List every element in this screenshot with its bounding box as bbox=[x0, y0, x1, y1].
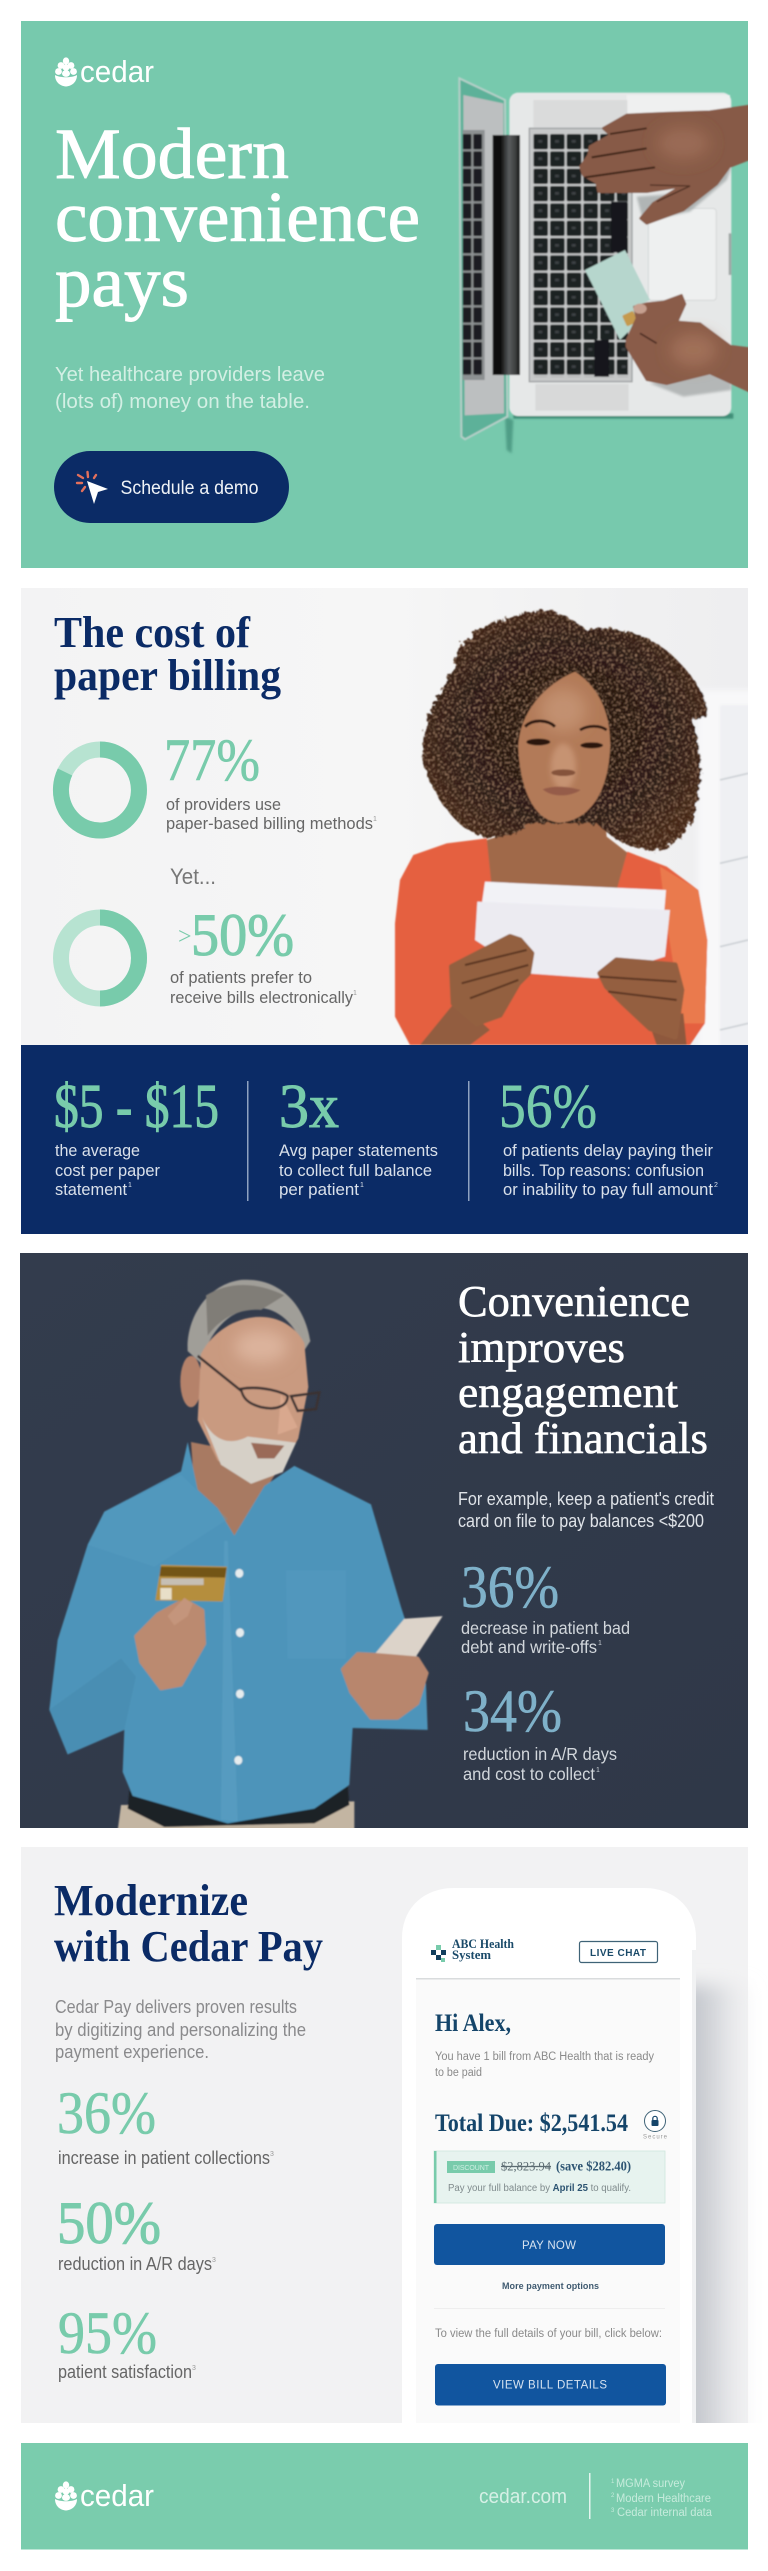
sources: 1 bbox=[611, 2479, 615, 2485]
stat: 77% of providers: 77% bbox=[164, 727, 260, 793]
paragraph: payment experience. bbox=[55, 2042, 209, 2062]
stat: 95% satisfaction: 3 bbox=[192, 2365, 196, 2372]
stat: cost per statement bbox=[54, 1073, 219, 1199]
laptop shadow bbox=[505, 417, 513, 453]
stat: 56% delay: 56% bbox=[499, 1073, 597, 1141]
window background bbox=[698, 690, 755, 1057]
section heading: The cost of bbox=[54, 608, 251, 657]
stat: 34% reduction: 34% bbox=[463, 1678, 562, 1744]
right hand bbox=[343, 1654, 427, 1718]
stat: over 50% of patients: 50% bbox=[191, 902, 294, 968]
icon: pine cone bbox=[55, 2481, 77, 2510]
website: cedar.com bbox=[479, 2486, 567, 2508]
top: coral bbox=[395, 838, 707, 1045]
stat: 77% of providers: of providers use bbox=[166, 795, 281, 814]
hinge bbox=[493, 135, 520, 375]
logo: cedar bbox=[55, 54, 154, 89]
pants bbox=[118, 1801, 354, 1831]
stat: 36% decrease bbox=[461, 1554, 630, 1657]
photo: laptop and hands with card bbox=[459, 78, 750, 453]
stat: 56% delay: 2 bbox=[714, 1182, 718, 1189]
stat: 56% delay: or inability to pay full amount bbox=[503, 1180, 713, 1199]
section heading: engagement bbox=[458, 1368, 678, 1417]
hand: top bbox=[581, 106, 750, 223]
stat: 50% A/R days bbox=[57, 2190, 216, 2274]
belt bbox=[128, 1783, 349, 1827]
stat: 50% A/R days: reduction in A/R days bbox=[58, 2254, 212, 2274]
photo: man with card and phone bbox=[49, 1280, 443, 1831]
stat: 3x statements: 1 bbox=[360, 1182, 364, 1189]
stat: 3x statements: per patient bbox=[279, 1180, 359, 1199]
button: live chat: LIVE CHAT bbox=[590, 1948, 646, 1959]
stat: 36% collections: 36% bbox=[57, 2080, 156, 2146]
discount box: Pay your full balance by April 25 to qualify. bbox=[448, 2183, 631, 2194]
phone header: ABC Health bbox=[452, 1936, 515, 1951]
section heading: and financials bbox=[458, 1414, 708, 1463]
stat: 3x statements: to collect full balance bbox=[279, 1161, 432, 1180]
phone header: System bbox=[452, 1947, 491, 1962]
hand: right bbox=[600, 960, 682, 1037]
stat: 36% decrease: 36% bbox=[461, 1554, 559, 1620]
hand: left bbox=[452, 937, 532, 1023]
stat: 34% reduction bbox=[463, 1678, 617, 1784]
divider bbox=[247, 1081, 248, 1201]
sources: MGMA survey bbox=[616, 2478, 685, 2490]
sources bbox=[611, 2478, 713, 2519]
stat: 56% delay: of patients delay paying their bbox=[503, 1141, 713, 1160]
left hand bbox=[136, 1600, 204, 1688]
gold card bbox=[155, 1565, 227, 1602]
laptop lid bbox=[459, 78, 507, 439]
shirt bbox=[49, 1442, 428, 1823]
stat: over 50% of patients bbox=[170, 902, 357, 1007]
sources: Modern Healthcare bbox=[616, 2493, 711, 2505]
logo: cedar: cedar bbox=[80, 2478, 154, 2513]
text: credit card example: card on file to pay balances <$200 bbox=[458, 1511, 704, 1531]
button: schedule a demo: Schedule a demo bbox=[120, 478, 258, 499]
panel: modernize with cedar pay bbox=[21, 1847, 756, 2465]
stat: 95% satisfaction: patient satisfaction bbox=[58, 2362, 192, 2382]
stat: 77% of providers: 1 bbox=[373, 816, 377, 823]
donut chart: 50% bbox=[61, 918, 139, 998]
bill message bbox=[435, 2051, 654, 2079]
divider bbox=[468, 1081, 470, 1201]
panel: hero bbox=[21, 21, 750, 568]
paragraph bbox=[55, 1997, 306, 2062]
papers bbox=[475, 882, 670, 978]
button: pay now: PAY NOW bbox=[522, 2240, 576, 2252]
phone mockup bbox=[402, 1888, 696, 2423]
stat: 3x statements: Avg paper statements bbox=[279, 1141, 438, 1160]
wordmark: cedar bbox=[80, 54, 154, 89]
neck and chest bbox=[487, 803, 628, 890]
greeting: Hi Alex, bbox=[435, 2010, 511, 2037]
phone bbox=[373, 1616, 443, 1657]
hero title bbox=[55, 114, 420, 322]
section heading: Modernize bbox=[54, 1876, 248, 1925]
icon: pine cone bbox=[55, 57, 77, 86]
icon: secure lock: Secure bbox=[643, 2134, 668, 2140]
stat: cost per statement: the average bbox=[55, 1141, 140, 1160]
stat: 36% decrease: 1 bbox=[598, 1640, 602, 1647]
phone header bbox=[416, 1936, 680, 1980]
hero subtitle bbox=[55, 364, 325, 413]
stat: 36% decrease: decrease in patient bad bbox=[461, 1618, 630, 1638]
stat: 95% satisfaction bbox=[58, 2300, 196, 2382]
stat: 34% reduction: and cost to collect bbox=[463, 1764, 595, 1784]
section heading: with Cedar Pay bbox=[54, 1922, 323, 1971]
hair bbox=[423, 610, 707, 850]
hero title: Modern bbox=[55, 114, 289, 194]
stat: cost per statement: $5 - $15 bbox=[54, 1073, 219, 1141]
stat: cost per statement: statement bbox=[55, 1180, 127, 1199]
stat: 77% of providers: paper-based billing methods bbox=[166, 814, 373, 833]
glasses bbox=[198, 1356, 319, 1411]
stat: 50% A/R days: 50% bbox=[57, 2190, 161, 2256]
stat: over 50% of patients: receive bills electronically bbox=[170, 988, 353, 1007]
icon: cursor click bbox=[77, 472, 108, 504]
sources: Cedar internal data bbox=[617, 2507, 713, 2519]
hero subtitle: (lots of) money on the table. bbox=[55, 391, 310, 413]
hand: bottom bbox=[627, 295, 750, 397]
button: view bill details bbox=[435, 2364, 666, 2406]
bill message: to be paid bbox=[435, 2067, 482, 2079]
section heading bbox=[54, 1876, 323, 1971]
stat: 36% collections: increase in patient collections bbox=[58, 2148, 270, 2168]
hero subtitle: Yet healthcare providers leave bbox=[55, 364, 325, 386]
panel: the cost of paper billing bbox=[21, 588, 755, 1057]
stat: over 50% of patients: of patients prefer to bbox=[170, 968, 312, 987]
stat: 34% reduction: 1 bbox=[596, 1767, 600, 1774]
stat: 50% A/R days: 3 bbox=[212, 2257, 216, 2264]
hair bbox=[188, 1280, 310, 1363]
section heading bbox=[54, 608, 281, 700]
stat: 56% delay bbox=[499, 1073, 718, 1199]
photo: woman reading bills bbox=[395, 610, 755, 1057]
text: yet: Yet... bbox=[170, 864, 216, 889]
face bbox=[518, 672, 610, 823]
credit card bbox=[585, 250, 650, 340]
discount box: DISCOUNT bbox=[453, 2165, 490, 2172]
text: credit card example: For example, keep a patient's credit bbox=[458, 1489, 714, 1509]
stat: over 50% of patients: > bbox=[178, 924, 192, 950]
total due: Total Due: $2,541.54 bbox=[435, 2110, 628, 2137]
stat: 77% of providers bbox=[164, 727, 377, 833]
stat: over 50% of patients: 1 bbox=[353, 990, 357, 997]
stat: 34% reduction: reduction in A/R days bbox=[463, 1744, 617, 1764]
text: credit card example bbox=[458, 1489, 714, 1531]
button: schedule a demo bbox=[54, 451, 289, 523]
ear bbox=[180, 1356, 202, 1407]
panel: navy statistics band bbox=[21, 1045, 748, 1234]
paragraph: Cedar Pay delivers proven results bbox=[55, 1997, 297, 2017]
stat: 36% collections: 3 bbox=[270, 2151, 274, 2158]
phone shadow bbox=[696, 1978, 736, 2423]
stat: 36% collections bbox=[57, 2080, 274, 2168]
button: pay now bbox=[434, 2224, 665, 2265]
paragraph: by digitizing and personalizing the bbox=[55, 2020, 306, 2040]
stat: 36% decrease: debt and write-offs bbox=[461, 1637, 597, 1657]
hero title: pays bbox=[55, 242, 189, 322]
stat: cost per statement: cost per paper bbox=[55, 1161, 160, 1180]
stat: 3x statements: 3x bbox=[279, 1073, 339, 1141]
neck bbox=[191, 1442, 284, 1537]
stat: 3x statements bbox=[279, 1073, 438, 1199]
bill details prompt: To view the full details of your bill, click below: bbox=[435, 2328, 662, 2340]
discount box: $2,823.94 bbox=[501, 2158, 551, 2174]
section heading: paper billing bbox=[54, 651, 281, 700]
stat: 95% satisfaction: 95% bbox=[58, 2300, 157, 2366]
button: live chat bbox=[580, 1942, 658, 1962]
panel: convenience bbox=[20, 1253, 748, 1831]
link: more payment options: More payment options bbox=[502, 2281, 599, 2291]
bill message: You have 1 bill from ABC Health that is ready bbox=[435, 2051, 654, 2063]
icon: ABC logo bbox=[431, 1945, 446, 1962]
icon: secure lock bbox=[643, 2110, 668, 2140]
section heading: improves bbox=[458, 1323, 625, 1372]
sources: 2 bbox=[611, 2493, 615, 2499]
buttons bbox=[234, 1569, 244, 1765]
section heading bbox=[458, 1277, 708, 1463]
panel: footer bbox=[21, 2443, 748, 2550]
laptop base bbox=[509, 93, 731, 416]
stat: cost per statement: 1 bbox=[128, 1182, 132, 1189]
discount box: (save $282.40) bbox=[556, 2158, 631, 2174]
sources: 3 bbox=[611, 2508, 615, 2514]
beard bbox=[202, 1416, 296, 1484]
button: view bill details: VIEW BILL DETAILS bbox=[493, 2380, 607, 2392]
section heading: Convenience bbox=[458, 1277, 690, 1326]
donut chart: 77% bbox=[61, 750, 139, 830]
stat: 56% delay: bills. Top reasons: confusion bbox=[503, 1161, 704, 1180]
hero title: convenience bbox=[55, 177, 420, 257]
discount box bbox=[434, 2151, 665, 2203]
face bbox=[198, 1317, 308, 1482]
